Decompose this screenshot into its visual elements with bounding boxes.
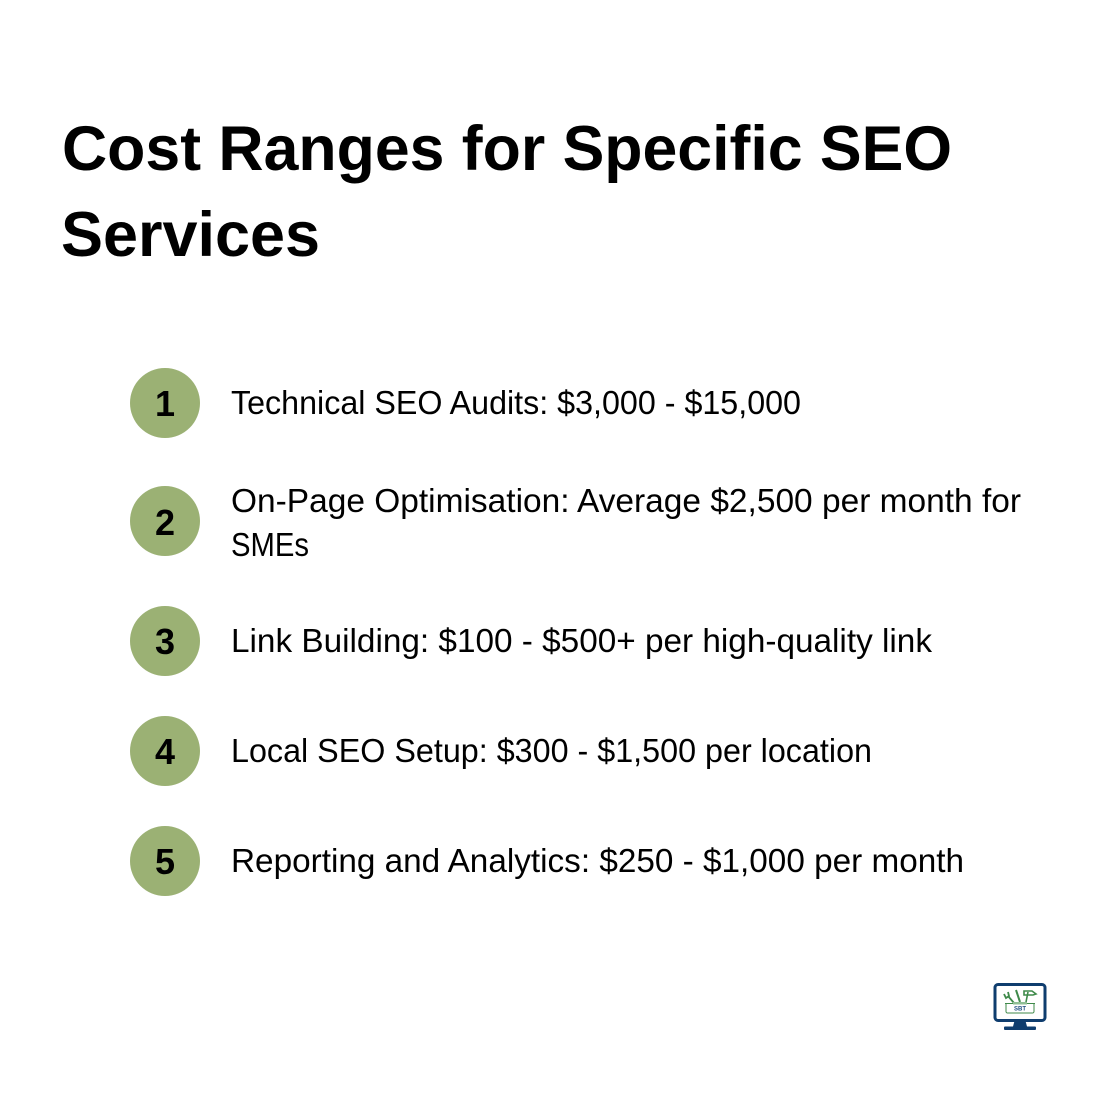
item 5: reporting and analytics — [130, 826, 964, 896]
item 5: reporting and analytics: Reporting and Analytics: $250 - $1,000 per month — [231, 842, 964, 879]
title: Services — [61, 200, 320, 270]
title: Cost Ranges for Specific SEO — [62, 114, 952, 184]
item 1: technical SEO audits: 1 — [155, 383, 175, 424]
title — [61, 114, 952, 270]
item 2: on-page optimisation: SMEs — [231, 526, 309, 563]
item 4: local SEO setup: 4 — [155, 731, 175, 772]
item 3: link building — [130, 606, 932, 676]
item 1: technical SEO audits — [130, 368, 801, 438]
item 2: on-page optimisation: 2 — [155, 502, 175, 543]
icon: computer monitor with toolbox logo — [995, 984, 1045, 1030]
item 5: reporting and analytics: 5 — [155, 841, 175, 882]
item 3: link building: Link Building: $100 - $500+ per high-quality link — [231, 622, 932, 659]
list of SEO service costs — [130, 368, 1021, 896]
item 4: local SEO setup: Local SEO Setup: $300 - $1,500 per location — [231, 732, 872, 769]
item 2: on-page optimisation — [130, 482, 1021, 563]
item 3: link building: 3 — [155, 621, 175, 662]
item 1: technical SEO audits: Technical SEO Audits: $3,000 - $15,000 — [231, 384, 801, 421]
item 4: local SEO setup — [130, 716, 872, 786]
icon: computer monitor with toolbox logo: SBT — [1014, 1006, 1026, 1012]
item 2: on-page optimisation: On-Page Optimisation: Average $2,500 per month for — [231, 482, 1021, 519]
